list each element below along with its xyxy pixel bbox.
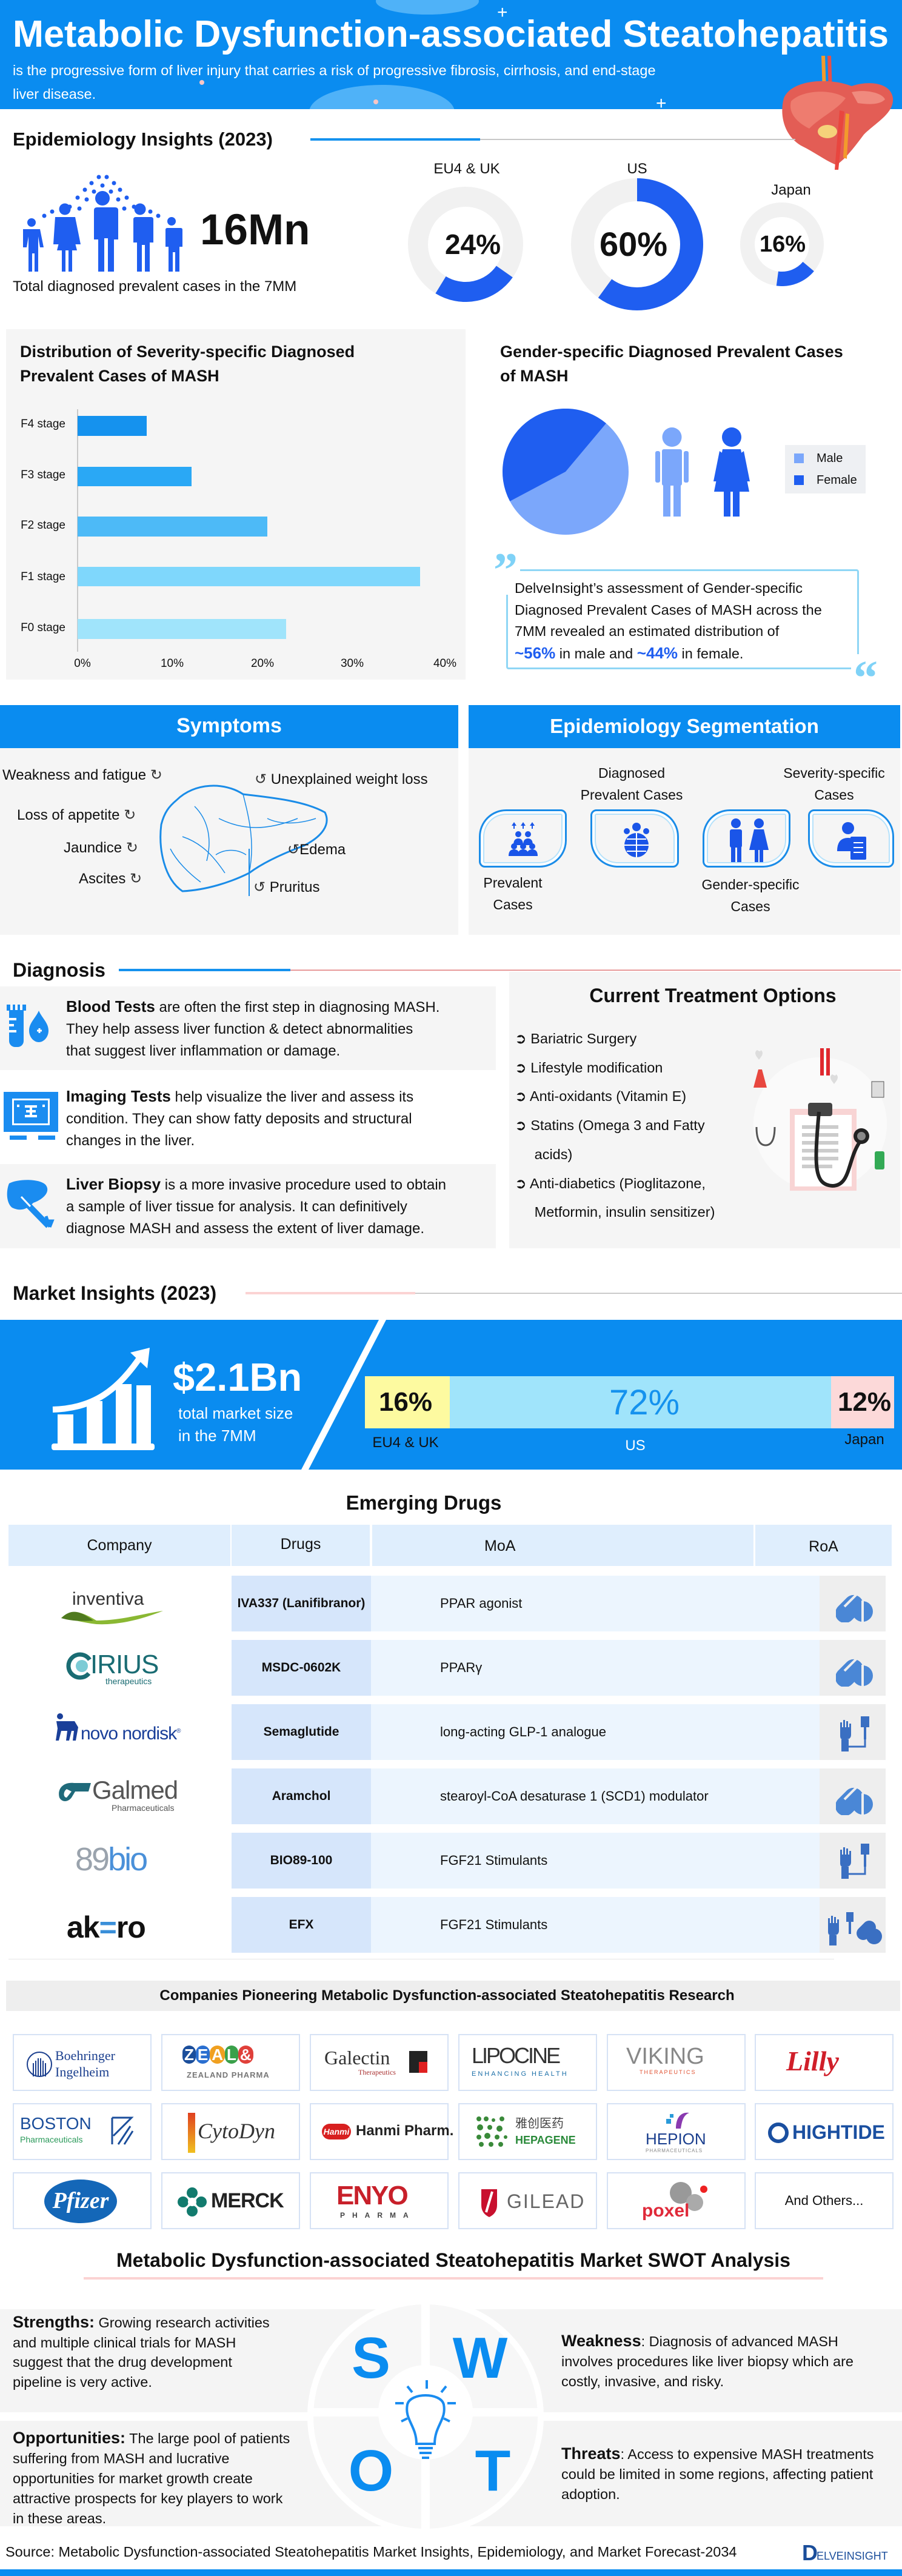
icon: people group <box>23 175 182 272</box>
logo: DelveInsight: ELVEINSIGHT <box>817 2550 888 2562</box>
logo grid: companies: Galectin <box>324 2047 390 2069</box>
row: liver biopsy: Liver Biopsy is a more invasive procedure used to obtain <box>66 1175 446 1193</box>
banner: companies pioneering: Companies Pioneering Metabolic Dysfunction-associated Steatohepatitis Research <box>159 1987 735 2004</box>
label: severity <box>783 765 885 803</box>
logo grid: companies: VIKING <box>626 2044 704 2069</box>
logo grid: companies: THERAPEUTICS <box>640 2069 697 2075</box>
row: liver biopsy: diagnose MASH and assess the extent of liver damage. <box>66 1220 424 1237</box>
diagram: SWOT circle <box>304 2295 547 2538</box>
box: diagnosed <box>590 809 679 868</box>
text: threats: adoption. <box>561 2486 620 2502</box>
panel: symptoms <box>0 705 458 935</box>
label: gender <box>701 877 800 914</box>
symptom labels: Weakness and fatigue ↻ <box>2 767 162 783</box>
row: 89bio: FGF21 Stimulants <box>440 1853 547 1868</box>
table header: RoA <box>809 1538 838 1555</box>
logo grid: companies: Lilly <box>786 2046 839 2076</box>
text: opportunities: opportunities for market growth create <box>13 2471 253 2486</box>
row: imaging tests: Imaging Tests help visualize the liver and assess its <box>66 1087 413 1105</box>
treatment list <box>515 1031 715 1220</box>
icon: female figure <box>713 427 750 517</box>
heading: Emerging Drugs: Emerging Drugs <box>346 1491 501 1514</box>
row: cirius: IRIUS <box>90 1650 158 1679</box>
donut: US: US <box>627 161 647 177</box>
text: total market size: in the 7MM <box>178 1427 256 1445</box>
logo grid: companies: ZEAL& <box>184 2046 252 2064</box>
logo grid: companies: Hanmi Pharm. <box>356 2123 453 2139</box>
text: strengths: and multiple clinical trials for MASH <box>13 2334 236 2350</box>
donut: Japan: 16% <box>760 232 806 257</box>
row: imaging tests <box>0 1070 496 1164</box>
row: cirius: PPARγ <box>440 1660 482 1675</box>
row: cirius: MSDC-0602K <box>262 1661 341 1674</box>
row: inventiva: inventiva <box>72 1589 144 1609</box>
logo grid: companies: HEPAGENE <box>515 2134 576 2146</box>
panel: severity distribution <box>6 329 466 680</box>
stacked bar: regional share: 12% <box>838 1387 891 1417</box>
treatment list: ➲ Bariatric Surgery <box>515 1031 636 1046</box>
text: threats: Threats: Access to expensive MASH treatments <box>561 2444 874 2463</box>
text: weakness: involves procedures like liver biopsy which are <box>561 2354 854 2369</box>
logo grid: companies: BOSTON <box>20 2114 92 2133</box>
text: total diagnosed: Total diagnosed prevalent cases in the 7MM <box>13 278 296 295</box>
treatment list: ➲ Lifestyle modification <box>515 1060 663 1076</box>
row: imaging tests: condition. They can show fatty deposits and structural <box>66 1111 412 1127</box>
donut: Japan: Japan <box>771 182 811 198</box>
quote text <box>515 580 822 662</box>
bar chart: 10% <box>161 657 184 670</box>
table header: MoA <box>484 1537 515 1554</box>
pie chart: gender <box>503 409 629 535</box>
divider stripe <box>301 1320 386 1470</box>
label: prevalent: Cases <box>493 897 533 912</box>
treatment list: ➲ Statins (Omega 3 and Fatty <box>515 1117 705 1133</box>
row: akero: FGF21 Stimulants <box>440 1917 547 1932</box>
text: weakness: costly, invasive, and risky. <box>561 2374 724 2389</box>
logo grid: companies: CytoDyn <box>198 2119 275 2143</box>
heading: Diagnosis: Diagnosis <box>13 959 105 981</box>
icon: oral pill <box>820 1768 886 1824</box>
logo grid: companies: MERCK <box>211 2189 284 2212</box>
treatment list: ➲ Anti-diabetics (Pioglitazone, <box>515 1176 706 1191</box>
illustration: clipboard and stethoscope <box>753 1048 884 1191</box>
diagram: SWOT circle: S <box>352 2326 390 2390</box>
treatment list: acids) <box>535 1146 572 1162</box>
text: threats <box>561 2444 874 2504</box>
label: prevalent: Prevalent <box>483 875 543 891</box>
donut: EU4 & UK: EU4 & UK <box>433 161 500 177</box>
bar chart: F4 stage <box>21 418 65 430</box>
row: cirius: therapeutics <box>105 1676 152 1686</box>
label: diagnosed prevalent <box>581 765 683 803</box>
box: gender <box>703 809 790 868</box>
logo grid: companies: ENHANCING HEALTH <box>472 2070 569 2078</box>
row: akero: ak=ro <box>67 1910 145 1944</box>
row: novo nordisk: Semaglutide <box>264 1725 339 1739</box>
diagram: SWOT circle: W <box>453 2326 508 2390</box>
panel: symptoms: ↺Edema <box>287 841 346 858</box>
text: opportunities <box>13 2428 290 2529</box>
logo grid: companies: LIPOCINE <box>472 2043 559 2068</box>
logo: DelveInsight: D <box>802 2540 818 2565</box>
text: strengths: pipeline is very active. <box>13 2374 152 2390</box>
label: severity: Cases <box>814 787 854 803</box>
row: liver biopsy: a sample of liver tissue for analysis. It can definitively <box>66 1199 407 1215</box>
label: diagnosed prevalent: Diagnosed <box>598 765 665 781</box>
text: total market size: total market size <box>178 1404 293 1422</box>
row: inventiva: PPAR agonist <box>440 1596 522 1611</box>
donut: EU4 & UK: 24% <box>445 229 501 260</box>
bar chart: 20% <box>251 657 274 670</box>
logo grid: companies: Pharmaceuticals <box>20 2135 82 2144</box>
panel: symptoms: Jaundice ↻ <box>64 840 138 856</box>
text: weakness: Weakness: Diagnosis of advanced MASH <box>561 2332 838 2350</box>
panel: epidemiology segmentation <box>469 705 900 935</box>
row: blood tests: They help assess liver function & detect abnormalities <box>66 1021 413 1037</box>
heading: Current Treatment Options <box>589 985 837 1006</box>
row: liver biopsy <box>0 1164 496 1248</box>
row: imaging tests: changes in the liver. <box>66 1132 195 1149</box>
legend: gender <box>785 445 866 493</box>
subtitle: is the progressive form of liver injury that carries a risk of progressive fibrosis, cirrhosis, and end-stage <box>13 62 656 78</box>
icon: oral pill <box>820 1576 886 1631</box>
logo grid: companies: poxel <box>642 2201 689 2221</box>
banner: companies pioneering <box>6 1981 900 2011</box>
bar chart <box>21 409 456 670</box>
heading: Prevalent Cases of MASH <box>20 367 219 385</box>
logo grid: companies: Ingelheim <box>55 2064 109 2079</box>
icon: injection <box>820 1704 886 1760</box>
row: 89bio: 89bio <box>75 1841 146 1878</box>
stat: 16Mn: 16Mn <box>200 206 310 254</box>
row: galmed: Aramchol <box>272 1789 330 1803</box>
stacked bar: regional share <box>365 1376 894 1454</box>
icon: close quote: “ <box>854 652 878 705</box>
text: strengths: Strengths: Growing research activities <box>13 2313 270 2331</box>
decorative blobs <box>199 0 667 109</box>
row: akero: EFX <box>289 1918 313 1932</box>
text: strengths <box>13 2312 270 2392</box>
donut: US <box>571 161 703 310</box>
panel: symptoms: ↺ Pruritus <box>253 879 319 895</box>
row: cirius <box>67 1640 886 1696</box>
logo grid: companies: And Others... <box>785 2193 863 2208</box>
donut: Japan <box>740 182 824 286</box>
heading: Epidemiology Insights: Epidemiology Insights (2023) <box>13 129 273 150</box>
label: diagnosed prevalent: Prevalent Cases <box>581 787 683 803</box>
panel: symptoms: Ascites ↻ <box>79 871 142 887</box>
stat: $2.1Bn: $2.1Bn <box>173 1355 302 1399</box>
row: galmed: stearoyl-CoA desaturase 1 (SCD1) modulator <box>440 1788 709 1804</box>
treatment list: Metformin, insulin sensitizer) <box>535 1204 715 1220</box>
icon: growth chart <box>52 1348 155 1450</box>
row: blood tests: that suggest liver inflammation or damage. <box>66 1043 340 1059</box>
row: blood tests <box>0 986 496 1070</box>
logo grid: companies: Pfizer <box>53 2188 109 2213</box>
text: opportunities: attractive prospects for key players to work <box>13 2491 282 2506</box>
title: Metabolic Dysfunction-associated Steatohepatitis <box>13 13 889 55</box>
illustration: liver outline <box>159 785 328 896</box>
heading: Distribution of Severity-specific Diagnosed <box>20 343 355 361</box>
logo grid: companies: ZEALAND PHARMA <box>187 2070 270 2079</box>
treatment list: ➲ Anti-oxidants (Vitamin E) <box>515 1088 686 1104</box>
heading: gender-specific <box>500 343 843 385</box>
heading: gender-specific: of MASH <box>500 367 568 385</box>
bar chart: F2 stage <box>21 519 65 532</box>
row: galmed: Pharmaceuticals <box>112 1803 175 1813</box>
icon: oral pill <box>820 1640 886 1696</box>
stacked bar: regional share: Japan <box>844 1431 884 1448</box>
stacked bar: regional share: 16% <box>379 1387 432 1417</box>
logo grid: companies: 雅创医药 <box>515 2117 564 2130</box>
panel: SWOT analysis <box>0 2309 902 2526</box>
donut: EU4 & UK <box>408 161 523 302</box>
row: akero <box>67 1897 886 1953</box>
table: emerging drugs <box>8 1525 892 1959</box>
icon: liver illustration <box>782 56 894 170</box>
text: opportunities: in these areas. <box>13 2511 106 2526</box>
heading <box>469 705 900 748</box>
stacked bar: regional share: US <box>625 1437 646 1454</box>
row: 89bio: BIO89-100 <box>270 1853 332 1867</box>
label: prevalent <box>483 875 543 912</box>
diagram: SWOT circle: O <box>349 2438 393 2503</box>
heading <box>20 343 355 385</box>
source footer: Source: Metabolic Dysfunction-associated Steatohepatitis Market Insights, Epidemiology, and Market Forecast-2034 <box>5 2544 737 2560</box>
logo grid: companies <box>13 2034 894 2229</box>
quote text: Diagnosed Prevalent Cases of MASH across the <box>515 601 822 617</box>
decorative blobs: + <box>497 2 508 22</box>
quote text: ~56% in male and ~44% in female. <box>515 644 743 662</box>
panel: symptoms: Loss of appetite ↻ <box>17 807 136 823</box>
logo grid: companies: PHARMA <box>340 2211 416 2220</box>
bar chart: F0 stage <box>21 621 65 634</box>
text: opportunities: Opportunities: The large pool of patients <box>13 2429 290 2447</box>
bar chart: F1 stage <box>21 570 65 583</box>
table header <box>8 1525 892 1566</box>
row: galmed: Galmed <box>92 1776 178 1804</box>
logo grid: companies: HEPION <box>646 2130 706 2148</box>
row: inventiva <box>61 1576 886 1631</box>
bar chart: F3 stage <box>21 469 65 481</box>
label: severity: Severity-specific <box>783 765 885 781</box>
row: blood tests: Blood Tests are often the first step in diagnosing MASH. <box>66 997 439 1015</box>
panel: market size band <box>0 1320 902 1470</box>
legend: gender: Female <box>817 473 857 487</box>
label: gender: Cases <box>730 898 770 914</box>
heading: gender-specific: Gender-specific Diagnosed Prevalent Cases <box>500 343 843 361</box>
logo: DelveInsight <box>802 2540 884 2566</box>
logo grid: companies: HIGHTIDE <box>792 2121 885 2143</box>
donut: US: 60% <box>600 225 667 263</box>
bottom bar <box>0 2569 902 2576</box>
panel: diagnosis <box>0 986 496 1248</box>
header banner <box>0 0 902 109</box>
logo grid: companies: ENYO <box>336 2181 407 2210</box>
bar chart: 40% <box>433 657 456 670</box>
icon: injection <box>820 1833 886 1889</box>
table header: Drugs <box>281 1536 321 1553</box>
logo grid: companies: Hanmi <box>324 2127 349 2136</box>
text: strengths: suggest that the drug development <box>13 2354 232 2370</box>
box: prevalent <box>479 809 567 868</box>
panel: symptoms: ↺ Unexplained weight loss <box>255 771 428 788</box>
text: total market size <box>178 1404 293 1445</box>
row: 89bio <box>75 1833 886 1889</box>
heading: Market Insights: Market Insights (2023) <box>13 1282 216 1304</box>
diagram: SWOT circle: T <box>475 2438 510 2503</box>
icon: open quote: ” <box>493 544 518 597</box>
quote text: DelveInsight’s assessment of Gender-specific <box>515 580 803 596</box>
heading: Epidemiology Segmentation <box>550 715 819 737</box>
logo grid: companies: GILEAD <box>507 2190 585 2212</box>
label: gender: Gender-specific <box>701 877 800 892</box>
bar chart: 0% <box>74 657 91 670</box>
logo grid: companies: Therapeutics <box>358 2068 396 2076</box>
row: galmed <box>59 1768 886 1824</box>
subtitle <box>13 62 656 102</box>
subtitle: liver disease. <box>13 86 96 102</box>
callout: gender quote <box>493 544 878 705</box>
text: threats: could be limited in some regions, affecting patient <box>561 2466 873 2482</box>
bar chart: 30% <box>341 657 364 670</box>
quote text: 7MM revealed an estimated distribution of <box>515 623 779 639</box>
box: severity <box>808 809 894 868</box>
icon: light bulb <box>395 2380 456 2458</box>
heading: SWOT <box>84 2249 823 2280</box>
text: weakness <box>561 2331 854 2392</box>
legend: gender: Male <box>817 452 843 465</box>
icon: injection and pill <box>820 1897 886 1953</box>
stacked bar: regional share: EU4 & UK <box>372 1434 439 1451</box>
row: novo nordisk <box>56 1704 886 1760</box>
row: novo nordisk: novo nordisk® <box>81 1724 180 1744</box>
text: opportunities: suffering from MASH and lucrative <box>13 2451 229 2466</box>
heading: SWOT: Metabolic Dysfunction-associated Steatohepatitis Market SWOT Analysis <box>116 2249 790 2271</box>
heading: Symptoms <box>176 714 282 737</box>
row: novo nordisk: long-acting GLP-1 analogue <box>440 1724 606 1739</box>
logo grid: companies: Boehringer <box>55 2048 115 2063</box>
stacked bar: regional share: 72% <box>609 1383 680 1422</box>
icon: male figure <box>655 427 689 517</box>
logo grid: companies: PHARMACEUTICALS <box>646 2148 703 2153</box>
row: inventiva: IVA337 (Lanifibranor) <box>238 1596 365 1610</box>
table header: Company <box>87 1537 152 1554</box>
heading <box>0 705 458 748</box>
panel: current treatment options <box>509 972 900 1248</box>
